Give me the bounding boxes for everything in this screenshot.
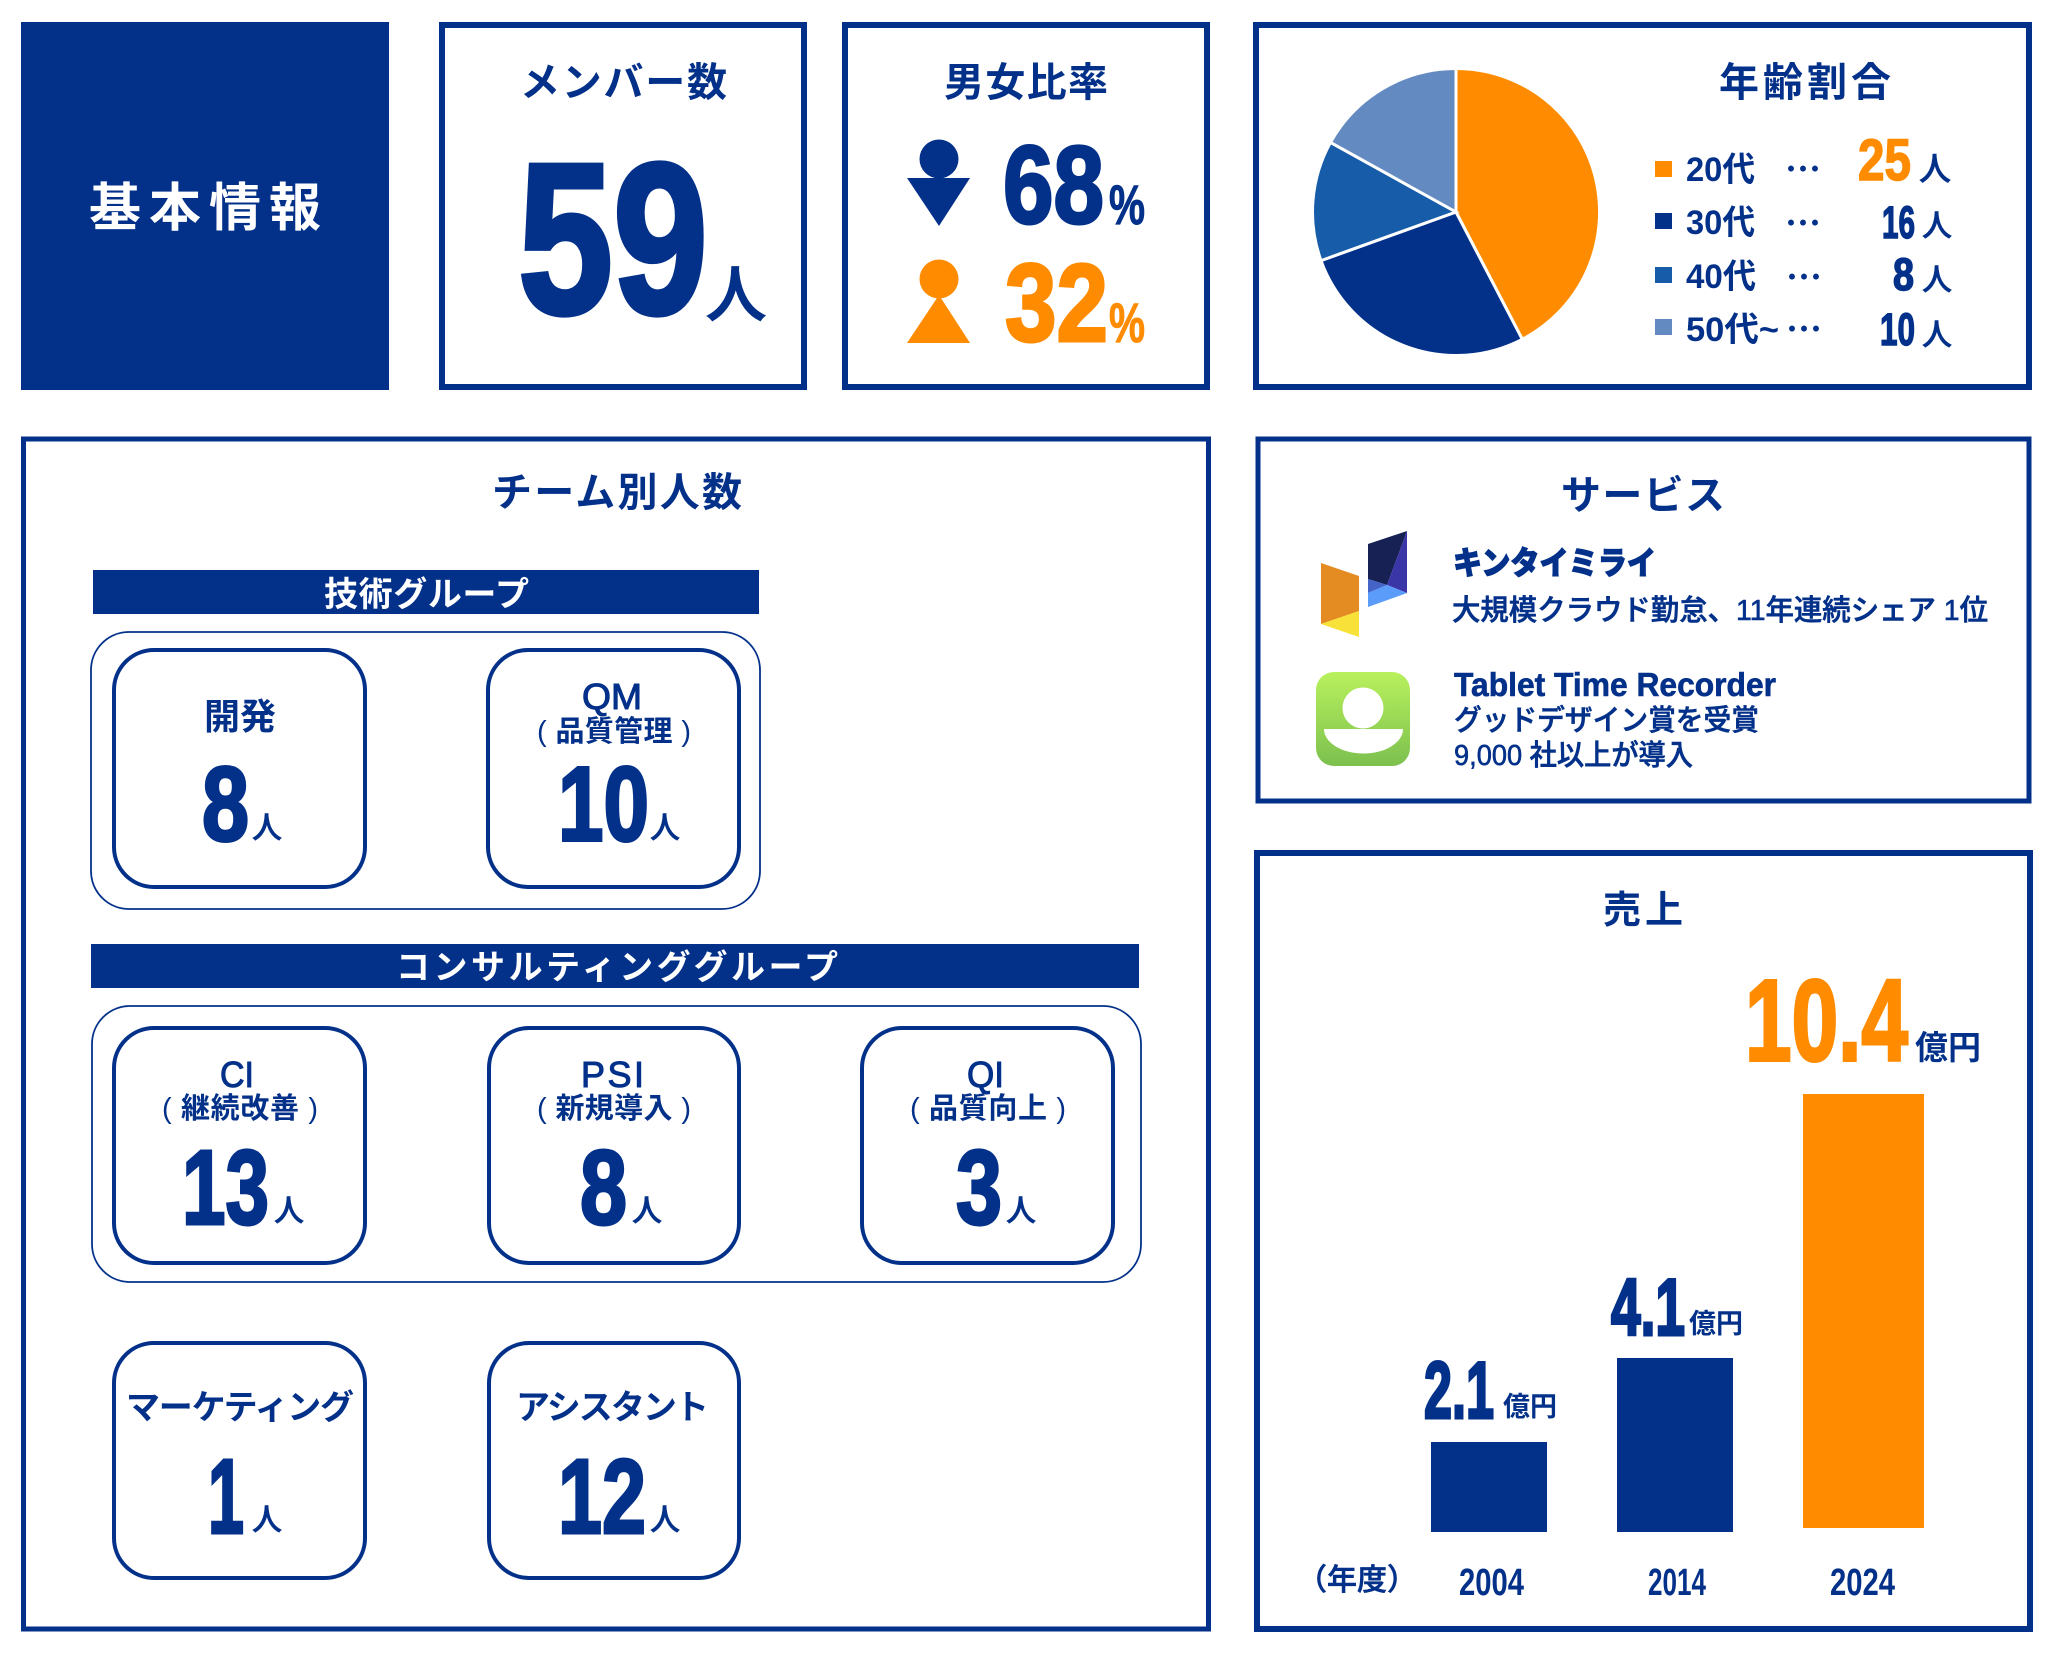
group header: consulting: コンサルティンググループ — [396, 949, 838, 987]
card: development — [114, 650, 365, 887]
pie chart — [1313, 68, 1600, 356]
bar chart: 億円 — [1689, 1309, 1743, 1339]
bar chart: （年度） — [1297, 1564, 1417, 1597]
card: assistant — [489, 1343, 739, 1578]
service: Tablet Time Recorder: 9,000 社以上が導入 — [1454, 739, 1693, 772]
legend: … — [1786, 249, 1822, 301]
legend: 人 — [1922, 210, 1952, 243]
card: assistant: 12 — [558, 1438, 646, 1556]
panel: gender ratio — [845, 25, 1207, 387]
legend: 40代 — [1686, 258, 1756, 296]
card: development: 8 — [202, 746, 249, 864]
card: QI: ( 品質向上 ) — [910, 1092, 1066, 1125]
panel: sales — [1257, 853, 2030, 1629]
card: QM: QM — [582, 676, 642, 717]
card: CI: 13 — [182, 1129, 269, 1247]
panel: member count: 59 — [518, 118, 708, 359]
legend: 20代 — [1686, 151, 1755, 189]
icon: female — [907, 260, 970, 343]
card: marketing: マーケティング — [126, 1389, 354, 1427]
legend: 8 — [1893, 249, 1914, 300]
bar chart: 2014 — [1648, 1562, 1706, 1604]
group header: consulting — [91, 944, 1139, 988]
panel: sales: 売上 — [1603, 890, 1683, 932]
card: QM: 人 — [650, 812, 680, 845]
card: QM — [488, 650, 739, 887]
group header: technology — [93, 570, 759, 614]
card: QI — [862, 1028, 1113, 1263]
panel: services — [1258, 439, 2029, 801]
legend: … — [1786, 301, 1822, 353]
legend: 50代~ — [1686, 311, 1779, 349]
panel: gender ratio: 男女比率 — [944, 61, 1108, 105]
card: CI: 人 — [274, 1195, 304, 1228]
card: PSI: 人 — [632, 1195, 662, 1228]
card: QM: 10 — [558, 746, 649, 864]
card: PSI: ( 新規導入 ) — [537, 1092, 691, 1125]
card: QI: 人 — [1006, 1195, 1036, 1228]
card: development: 人 — [252, 812, 282, 845]
panel: age distribution: 年齢割合 — [1719, 61, 1891, 105]
legend: 10 — [1880, 304, 1915, 355]
card: QM: ( 品質管理 ) — [537, 715, 691, 748]
panel: team headcount — [24, 439, 1208, 1629]
bar chart: 4.1 — [1611, 1263, 1685, 1353]
legend: 25 — [1858, 128, 1911, 193]
panel: gender ratio: % — [1109, 173, 1145, 236]
group outline: technology — [91, 632, 760, 909]
bar chart: 2004 — [1459, 1562, 1524, 1604]
bar chart: 10.4 — [1745, 956, 1908, 1086]
panel: member count: 人 — [706, 262, 766, 329]
service: Tablet Time Recorder — [1454, 666, 1776, 772]
card: PSI — [489, 1028, 739, 1263]
service: Tablet Time Recorder: グッドデザイン賞を受賞 — [1454, 704, 1759, 737]
legend: 30代 — [1686, 204, 1755, 242]
service: Tablet Time Recorder: Tablet Time Recorder — [1454, 666, 1776, 703]
panel: gender ratio: 32 — [1005, 242, 1108, 365]
group header: technology: 技術グループ — [324, 576, 529, 614]
card: PSI: PSI — [581, 1054, 644, 1095]
panel: team headcount: チーム別人数 — [492, 471, 742, 515]
legend — [1655, 128, 1952, 355]
bar chart: 億円 — [1503, 1392, 1557, 1422]
card: assistant: 人 — [650, 1504, 680, 1537]
icon: male — [907, 140, 970, 226]
group outline: consulting — [92, 1006, 1141, 1282]
bar chart: 億円 — [1915, 1029, 1981, 1066]
panel: basic info heading: 基本情報 — [89, 180, 321, 238]
card: CI: CI — [220, 1054, 254, 1095]
bar chart: 2.1 — [1424, 1346, 1494, 1436]
panel: age distribution — [1256, 25, 2029, 387]
legend: … — [1785, 141, 1821, 193]
panel: basic info heading — [21, 22, 389, 390]
legend: 人 — [1919, 151, 1951, 187]
icon: KintaiMirai logo — [1321, 531, 1407, 637]
bar chart — [1297, 956, 1981, 1604]
card: marketing — [114, 1343, 365, 1578]
panel: gender ratio: % — [1109, 291, 1145, 354]
card: QI: QI — [967, 1054, 1004, 1095]
card: CI — [114, 1028, 365, 1263]
card: QI: 3 — [956, 1129, 1002, 1247]
icon: Tablet Time Recorder app — [1316, 672, 1410, 766]
card: assistant: アシスタント — [516, 1389, 709, 1427]
bar chart: 2024 — [1830, 1562, 1895, 1604]
card: marketing: 人 — [252, 1504, 282, 1537]
legend: … — [1785, 195, 1821, 247]
legend: 16 — [1882, 197, 1915, 248]
legend: 人 — [1922, 319, 1952, 352]
legend: 人 — [1922, 264, 1952, 297]
panel: member count: メンバー数 — [520, 61, 727, 105]
card: marketing: 1 — [208, 1438, 244, 1556]
card: PSI: 8 — [580, 1129, 627, 1247]
card: CI: ( 継続改善 ) — [162, 1092, 318, 1125]
service: KintaiMirai: 大規模クラウド勤怠、11年連続シェア 1位 — [1452, 594, 1988, 627]
service: KintaiMirai — [1452, 545, 1988, 627]
card: development: 開発 — [204, 696, 276, 737]
service: KintaiMirai: キンタイミライ — [1453, 545, 1656, 581]
panel: gender ratio: 68 — [1003, 124, 1104, 247]
panel: member count — [442, 25, 804, 387]
panel: services: サービス — [1561, 474, 1725, 518]
